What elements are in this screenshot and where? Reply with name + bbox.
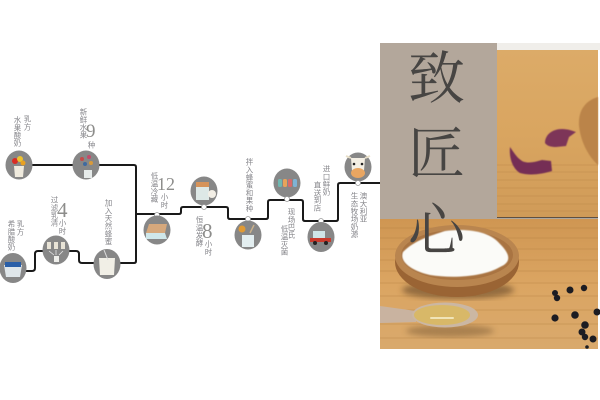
step 4 icon: whey filter xyxy=(42,236,70,264)
step 7 icon: fermentation jar xyxy=(190,176,218,210)
label: 现场巴氏低温灭菌: 现场巴氏 xyxy=(287,208,296,239)
label: 乳方水果酸奶 xyxy=(13,115,32,147)
title: 致匠心: 致 xyxy=(408,33,465,115)
label: 澳大利亚生态牧场奶源: 澳大利亚 xyxy=(359,192,368,223)
label: 现场巴氏低温灭菌: 低温灭菌 xyxy=(280,225,289,256)
label: 乳方希腊酸奶: 乳方 xyxy=(16,220,25,235)
label: 乳方水果酸奶: 水果酸奶 xyxy=(13,116,22,147)
taupe title panel xyxy=(380,43,497,219)
label: 新鲜水果9种: 新鲜水果 xyxy=(79,108,88,139)
label: 过滤乳清4小时: 小时 xyxy=(58,219,67,234)
label: 进口鲜奶直送到店: 进口鲜奶 xyxy=(322,165,331,196)
step 3 icon: greek yogurt tub xyxy=(0,253,26,283)
label: 现场巴氏低温灭菌 xyxy=(280,208,296,256)
step 5 icon: honey jar xyxy=(94,249,120,279)
label: 乳方希腊酸奶 xyxy=(7,220,25,251)
label: 恒温发酵8小时: 8 xyxy=(202,219,212,243)
label: 进口鲜奶直送到店 xyxy=(313,165,331,212)
label: 进口鲜奶直送到店: 直送到店 xyxy=(313,181,322,212)
label: 澳大利亚生态牧场奶源 xyxy=(350,192,368,238)
label: 新鲜水果9种: 9 xyxy=(86,121,96,142)
label: 低温冷藏12小时: 低温冷藏 xyxy=(150,172,159,203)
title: 致匠心 xyxy=(408,33,465,267)
label: 新鲜水果9种 xyxy=(79,108,96,149)
label: 恒温发酵8小时: 小时 xyxy=(204,240,213,255)
step 8 icon: honey and starter xyxy=(234,216,262,250)
step 11 icon: cow xyxy=(344,152,372,186)
label: 过滤乳清4小时: 4 xyxy=(57,198,68,222)
label: 澳大利亚生态牧场奶源: 生态牧场奶源 xyxy=(350,192,359,238)
step 2 icon: fresh fruits xyxy=(72,150,100,180)
label: 恒温发酵8小时 xyxy=(195,216,213,256)
title: 致匠心: 心 xyxy=(408,185,465,267)
label: 过滤乳清4小时 xyxy=(50,196,68,234)
label: 乳方希腊酸奶: 希腊酸奶 xyxy=(7,220,16,251)
label: 乳方水果酸奶: 乳方 xyxy=(23,115,32,130)
label: 加入天然蜂蜜: 加入天然蜂蜜 xyxy=(104,199,113,245)
photo panel: yogurt bowl on wood xyxy=(380,43,600,349)
label: 低温冷藏12小时 xyxy=(150,172,175,208)
step 10 icon: delivery truck xyxy=(308,218,334,252)
label: 过滤乳清4小时: 过滤乳清 xyxy=(50,196,59,227)
label: 新鲜水果9种: 种 xyxy=(87,141,96,149)
label: 低温冷藏12小时: 小时 xyxy=(160,193,169,208)
title: 致匠心: 匠 xyxy=(408,108,465,190)
label: 低温冷藏12小时: 12 xyxy=(157,174,175,194)
label: 恒温发酵8小时: 恒温发酵 xyxy=(195,216,204,247)
step 9 icon: pasteurization tubes xyxy=(274,168,300,202)
step 6 icon: cold storage xyxy=(144,212,170,244)
step 1 icon: fruit yogurt cup xyxy=(6,150,32,180)
label: 拌入蜂蜜和果种: 拌入蜂蜜和果种 xyxy=(245,158,254,212)
